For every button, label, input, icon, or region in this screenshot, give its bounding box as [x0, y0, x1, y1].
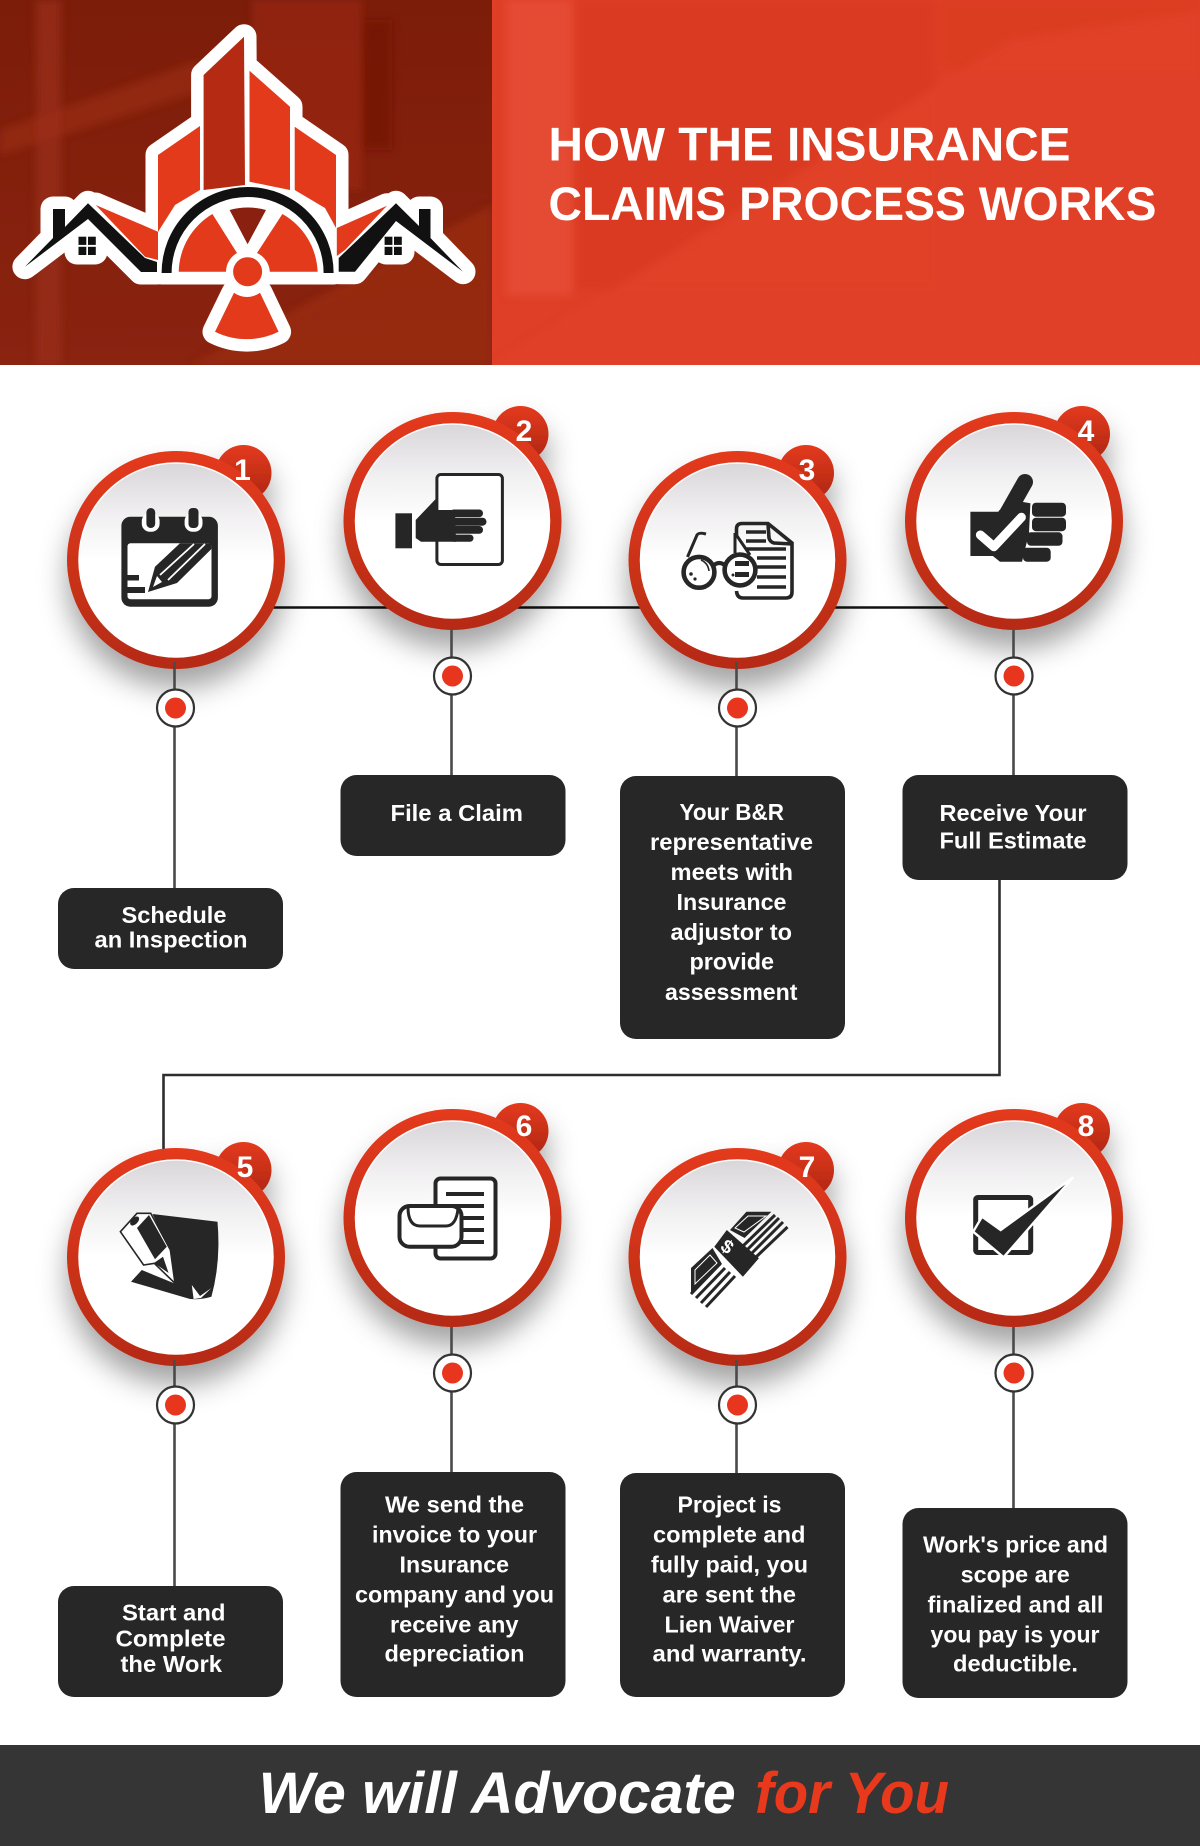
arch	[167, 192, 329, 273]
label box 3: representative	[650, 829, 813, 855]
step 8	[902, 1103, 1128, 1698]
stem and dot 4	[996, 630, 1032, 775]
label box 3: assessment	[665, 979, 798, 1005]
label box 1	[58, 888, 283, 969]
number 8: 8	[1078, 1110, 1094, 1143]
label box 5	[58, 1586, 283, 1697]
label box 4: Full Estimate	[940, 828, 1086, 854]
circle 3	[628, 445, 846, 669]
step 1	[58, 445, 285, 969]
number 6: 6	[516, 1110, 532, 1143]
label box 8: you pay is your	[930, 1621, 1100, 1647]
label box 6: Insurance	[400, 1552, 509, 1578]
label box 6	[340, 1472, 566, 1697]
label box 7: Lien Waiver	[664, 1612, 795, 1638]
label box 5: the Work	[120, 1651, 222, 1677]
step 3	[620, 445, 846, 1039]
icon: hand holding paper	[395, 474, 502, 564]
title: CLAIMS PROCESS WORKS	[548, 177, 1156, 230]
label box 7: are sent the	[662, 1582, 796, 1608]
circle 2	[344, 406, 562, 630]
label box 8	[902, 1508, 1128, 1698]
label box 6: depreciation	[384, 1640, 524, 1666]
number 4: 4	[1078, 415, 1095, 448]
number 3: 3	[799, 454, 815, 487]
label box 2	[340, 775, 566, 856]
icon: calendar and pencil	[121, 508, 218, 607]
circle 7	[628, 1142, 846, 1366]
stem and dot 1	[157, 662, 194, 889]
circle 1	[67, 445, 285, 669]
label box 7: fully paid, you	[651, 1552, 808, 1578]
label box 3: Your B&R	[680, 799, 784, 825]
label box 8: deductible.	[953, 1651, 1078, 1677]
step 6	[340, 1103, 566, 1697]
circle 6	[344, 1103, 562, 1327]
icon: checked box	[973, 1177, 1073, 1257]
step 2	[340, 406, 566, 856]
logo white outline	[25, 37, 463, 339]
icon: money bundle: $	[716, 1236, 737, 1259]
left house	[25, 203, 157, 272]
number 5: 5	[237, 1151, 253, 1184]
stem and dot 6	[434, 1327, 471, 1472]
label box 2: File a Claim	[390, 800, 523, 826]
label box 1: Schedule	[122, 902, 226, 928]
label box 6: invoice to your	[372, 1522, 537, 1548]
label box 3: provide	[690, 948, 774, 974]
label box 3: adjustor to	[670, 919, 792, 945]
label box 6: We send the	[385, 1492, 524, 1518]
circle 4	[905, 406, 1123, 630]
logo	[25, 37, 463, 339]
header left photo panel	[0, 0, 492, 365]
step 4	[902, 406, 1128, 880]
label box 4	[902, 775, 1128, 880]
title: HOW THE INSURANCE	[548, 118, 1070, 170]
icon: pencil on paper	[120, 1213, 218, 1299]
label box 5: Complete	[116, 1626, 226, 1652]
connector: row one to row two	[164, 880, 1000, 1150]
label box 7: complete and	[653, 1522, 806, 1548]
step 7	[620, 1142, 846, 1697]
label box 8: Work's price and	[923, 1531, 1108, 1557]
footer text: We will Advocate	[259, 1761, 736, 1826]
connector: top row line	[250, 606, 970, 609]
buildings	[96, 37, 387, 260]
icon: money bundle	[691, 1212, 788, 1307]
stem and dot 3	[719, 662, 756, 776]
number 2: 2	[516, 415, 532, 448]
stem and dot 5	[157, 1360, 194, 1586]
label box 6: receive any	[390, 1612, 519, 1638]
right house	[339, 203, 463, 272]
title	[548, 118, 1156, 230]
label box 7: and warranty.	[652, 1640, 806, 1666]
footer banner	[0, 1745, 1200, 1846]
stem and dot 8	[996, 1327, 1032, 1508]
label box 7	[620, 1473, 845, 1697]
circle 5	[67, 1142, 285, 1366]
stem and dot 7	[719, 1360, 756, 1473]
label box 6: company and you	[355, 1582, 554, 1608]
radiation symbol	[179, 208, 318, 339]
footer text	[259, 1761, 949, 1826]
panel: header	[0, 0, 1200, 365]
number 1: 1	[234, 454, 251, 487]
label box 4: Receive Your	[940, 800, 1087, 826]
label box 8: scope are	[961, 1561, 1070, 1587]
icon: envelope and document	[400, 1178, 496, 1258]
label box 3: Insurance	[676, 889, 786, 915]
label box 5: Start and	[122, 1600, 226, 1626]
label box 8: finalized and all	[928, 1591, 1104, 1617]
header right photo panel	[492, 0, 1200, 365]
step 5	[58, 1142, 285, 1697]
circle 8	[905, 1103, 1123, 1327]
label box 3	[620, 776, 845, 1039]
number 7: 7	[799, 1151, 815, 1184]
label box 3: meets with	[670, 859, 793, 885]
label box 1: an Inspection	[94, 926, 248, 952]
icon: glasses and document	[684, 524, 792, 598]
label box 7: Project is	[678, 1492, 782, 1518]
stem and dot 2	[434, 630, 471, 775]
footer text: for You	[755, 1761, 949, 1826]
icon: thumbs up with check	[970, 482, 1066, 562]
